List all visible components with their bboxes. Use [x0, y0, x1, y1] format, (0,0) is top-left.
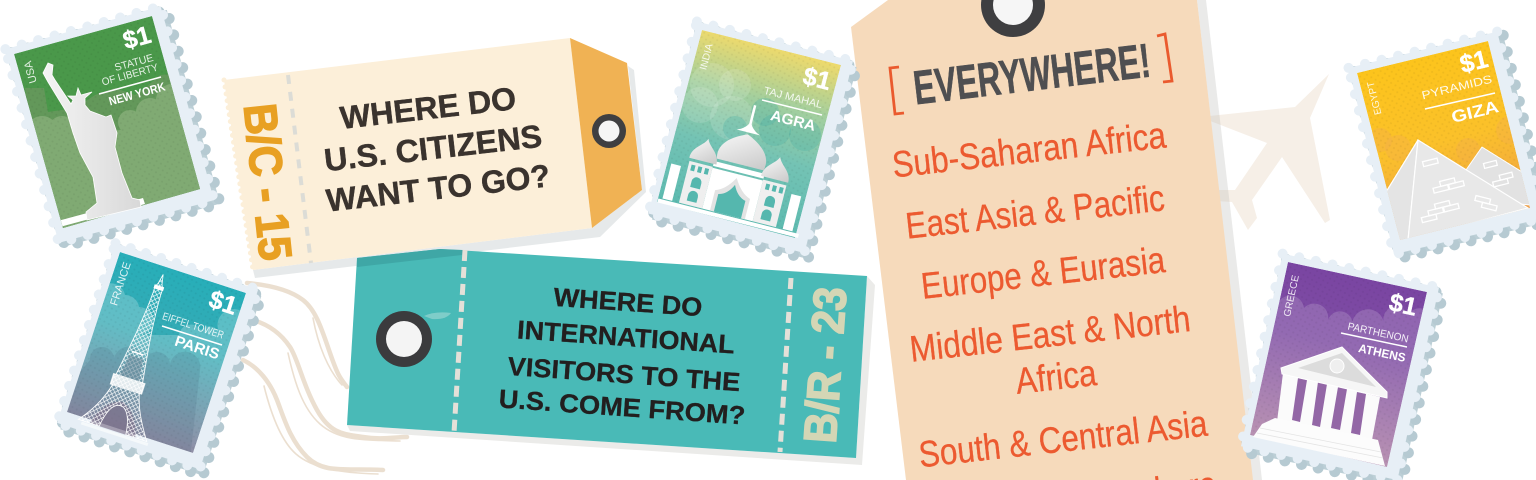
perforated left edge	[224, 80, 253, 270]
stamp labels: STATUE	[113, 52, 155, 74]
stamp labels: AGRA	[769, 107, 818, 135]
tear line right	[780, 278, 791, 452]
question text: WHERE DO	[553, 282, 703, 322]
stamp frame	[56, 243, 263, 476]
question text: U.S. CITIZENS	[322, 118, 544, 178]
cream tag body	[224, 38, 592, 270]
stamp labels: $1	[205, 285, 241, 321]
tag: everywhere list	[851, 0, 1262, 480]
tag shadow	[253, 66, 646, 278]
heading everywhere: EVERYWHERE!	[911, 35, 1153, 115]
stamp background	[1250, 262, 1427, 467]
question text: WANT TO GO?	[324, 157, 552, 219]
tag code: B/R - 23	[794, 285, 856, 445]
region list: East Asia & Pacific	[904, 177, 1166, 247]
region list: Middle East & North	[908, 298, 1192, 370]
teal tag body	[347, 249, 867, 458]
stamp labels: FRANCE	[108, 261, 134, 307]
stamp frame	[5, 5, 220, 248]
question text	[322, 80, 552, 219]
stamp labels: $1	[1457, 45, 1491, 79]
stamp: Greece parthenon	[1232, 254, 1444, 480]
question text: U.S. COME FROM?	[498, 383, 746, 431]
tag: where do U.S. citizens want to go	[224, 38, 646, 278]
stamp labels: $1	[1386, 288, 1420, 322]
tear line	[288, 75, 311, 263]
stamp labels	[1282, 274, 1420, 365]
taj mahal	[657, 88, 827, 238]
tear line left	[454, 250, 465, 433]
tag code: B/C - 15	[234, 101, 302, 263]
stamp labels: GREECE	[1282, 274, 1302, 318]
stamp labels	[108, 261, 241, 363]
stamp labels: NEW YORK	[107, 79, 167, 108]
question text: VISITORS TO THE	[507, 351, 741, 397]
eyelet	[376, 311, 451, 367]
tag shadow	[347, 276, 875, 465]
region list	[890, 114, 1218, 480]
stamp labels: PARTHENON	[1346, 321, 1410, 345]
parthenon	[1253, 347, 1387, 466]
question text: WHERE DO	[338, 80, 518, 136]
stamp frame	[647, 21, 858, 259]
pyramids	[1386, 140, 1530, 242]
stamp labels: TAJ MAHAL	[762, 85, 824, 111]
stamp labels: OF LIBERTY	[100, 62, 160, 88]
stamp background	[14, 16, 200, 228]
stamp: Egypt pyramids	[1349, 30, 1536, 259]
region list: Sub-Saharan Africa	[890, 114, 1168, 185]
statue silhouette	[43, 63, 141, 220]
orange tag end	[570, 38, 642, 228]
region list: South & Central Asia	[917, 403, 1210, 475]
stamp labels	[1366, 45, 1501, 127]
eyelet	[592, 114, 626, 148]
heading everywhere	[890, 34, 1172, 115]
question text	[498, 282, 746, 431]
tag: where do international visitors come from	[347, 249, 875, 465]
stamp labels: PARIS	[172, 333, 222, 363]
region list: Europe & Eurasia	[919, 239, 1167, 307]
stamp labels	[698, 42, 834, 135]
stamp labels: USA	[22, 59, 40, 84]
luggage strings	[243, 283, 407, 474]
stamp labels: PYRAMIDS	[1421, 74, 1494, 102]
stamp labels	[22, 21, 167, 108]
stamp background	[1357, 41, 1530, 240]
region list: Africa	[1013, 352, 1099, 402]
stamp: France eiffel tower	[40, 243, 263, 476]
stamp labels: $1	[800, 62, 834, 96]
stamp frame	[1349, 30, 1536, 259]
tag shadow	[1197, 0, 1262, 480]
stamp: India taj mahal	[647, 21, 858, 259]
stamp labels: EIFFEL TOWER	[161, 310, 226, 342]
stamp labels: $1	[120, 21, 154, 55]
stamp labels: INDIA	[698, 42, 716, 71]
stamp labels: ATHENS	[1357, 341, 1407, 365]
eyelet	[981, 0, 1045, 37]
stamp frame	[1240, 254, 1444, 480]
stamp labels: EGYPT	[1366, 80, 1384, 116]
eiffel tower	[77, 263, 199, 446]
stamp: USA statue of liberty	[5, 5, 220, 248]
stamp background	[67, 252, 246, 453]
tag body	[851, 0, 1253, 480]
question text: INTERNATIONAL	[516, 314, 736, 360]
stamp background	[657, 30, 841, 238]
fold strip	[357, 249, 463, 267]
plane silhouette	[1200, 74, 1330, 230]
stamp labels: GIZA	[1449, 97, 1501, 127]
